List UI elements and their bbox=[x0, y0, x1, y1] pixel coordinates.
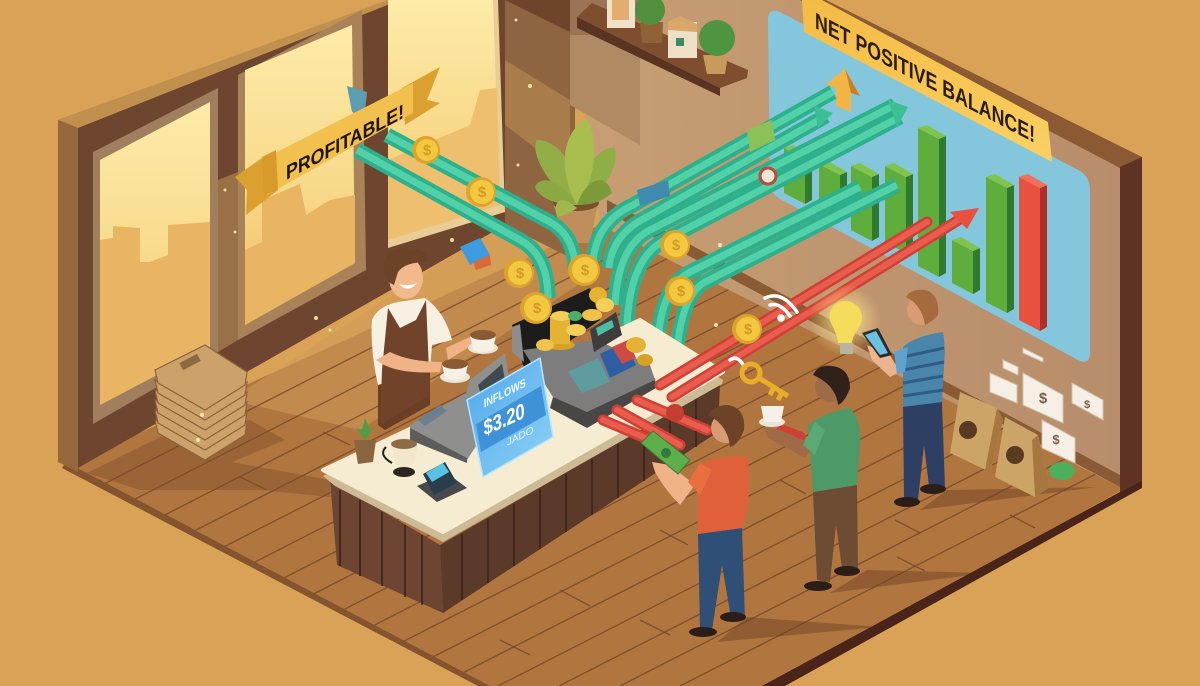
floating coins: $ bbox=[478, 184, 487, 201]
sleeve bbox=[688, 463, 712, 495]
holographic display: $3.20 bbox=[483, 398, 525, 441]
red outflow pipes bbox=[603, 208, 979, 445]
card reader bbox=[417, 462, 467, 502]
floor shadows bbox=[87, 420, 330, 497]
right wall bbox=[570, 0, 1142, 492]
small POS terminal bbox=[410, 353, 510, 463]
bar 5 bbox=[918, 125, 946, 277]
holographic display: INFLOWS bbox=[483, 375, 526, 411]
shirt bbox=[698, 457, 749, 534]
floating coins: $ bbox=[744, 321, 753, 338]
floating coins: $ bbox=[533, 300, 542, 317]
sparkle particles bbox=[196, 18, 722, 442]
coffee bag 2 bbox=[995, 417, 1050, 497]
customer green shirt bbox=[759, 366, 860, 591]
holographic display: JADO bbox=[507, 424, 534, 449]
arm bbox=[763, 427, 815, 458]
coffee bag 1 bbox=[950, 392, 1003, 472]
barista arms bbox=[376, 352, 442, 372]
small plant bbox=[354, 418, 376, 464]
light bulb bbox=[809, 284, 881, 356]
bar 8 red bbox=[1019, 174, 1047, 331]
chart panel bbox=[768, 11, 1090, 362]
counter bbox=[323, 320, 723, 613]
bar 6 bbox=[952, 237, 980, 294]
banner: net positive balance: NET POSITIVE BALANCE! bbox=[815, 8, 1035, 149]
legs bbox=[813, 485, 858, 582]
shoes bbox=[804, 581, 832, 591]
floor bbox=[62, 227, 1142, 686]
bar 2 bbox=[819, 161, 847, 218]
bar 7 bbox=[986, 174, 1014, 313]
legs bbox=[903, 402, 945, 500]
bar 1 bbox=[784, 145, 812, 204]
cup bbox=[759, 417, 785, 427]
coffee sacks bbox=[155, 345, 247, 460]
floating coins: $ bbox=[581, 262, 590, 279]
window right bbox=[388, 0, 505, 248]
banknote bbox=[641, 431, 690, 474]
arm bbox=[867, 345, 900, 377]
envelopes and money bags bbox=[950, 348, 1103, 497]
customer blue shirt bbox=[862, 290, 946, 507]
bar 4 bbox=[885, 163, 913, 253]
legs bbox=[698, 528, 745, 630]
customer orange shirt bbox=[641, 405, 749, 637]
window left bbox=[93, 88, 218, 424]
back wall: dark column bbox=[495, 0, 575, 260]
head bbox=[711, 413, 741, 443]
bar 3 bbox=[851, 163, 879, 241]
floating coins: $ bbox=[677, 283, 686, 300]
barista legs and apron bbox=[378, 365, 430, 430]
coin pile bbox=[536, 287, 653, 366]
shoes bbox=[894, 497, 920, 507]
window middle bbox=[238, 10, 366, 340]
sunlit floor patch bbox=[230, 225, 600, 430]
barista head bbox=[389, 257, 423, 299]
shelf with plants bbox=[577, 0, 748, 96]
envelopes and money bags: $ bbox=[1039, 390, 1048, 407]
envelopes and money bags: $ bbox=[1052, 432, 1060, 447]
key icon bbox=[742, 364, 788, 400]
green inflow pipes bbox=[357, 92, 908, 362]
floating coins bbox=[412, 136, 762, 344]
envelopes and money bags: $ bbox=[1084, 399, 1090, 411]
shirt bbox=[808, 408, 860, 492]
floating coins: $ bbox=[516, 265, 525, 282]
shirt bbox=[903, 332, 945, 407]
barista bbox=[372, 248, 498, 430]
coffee cup on counter bbox=[383, 439, 418, 477]
banner: profitable bbox=[235, 67, 440, 215]
head bbox=[815, 372, 845, 402]
wifi icon bbox=[730, 296, 797, 368]
barista apron bbox=[380, 300, 430, 425]
banner: net positive balance bbox=[802, 0, 1052, 162]
banner: profitable: PROFITABLE! bbox=[286, 100, 404, 185]
lit frame between windows bbox=[218, 172, 238, 352]
floating icons bbox=[460, 120, 776, 270]
holographic display bbox=[467, 358, 553, 477]
head bbox=[907, 295, 937, 325]
cups in hand bbox=[468, 342, 498, 354]
up arrow icon bbox=[826, 69, 860, 112]
floating coins: $ bbox=[423, 142, 432, 159]
phone bbox=[862, 328, 892, 358]
shoes bbox=[689, 627, 717, 637]
sleeve bbox=[803, 422, 825, 455]
potted plant bbox=[535, 118, 616, 243]
floating coins: $ bbox=[672, 237, 681, 254]
left wall with windows bbox=[58, 0, 505, 472]
arm bbox=[652, 462, 695, 505]
main cash register bbox=[512, 287, 656, 428]
barista shirt bbox=[372, 298, 452, 385]
